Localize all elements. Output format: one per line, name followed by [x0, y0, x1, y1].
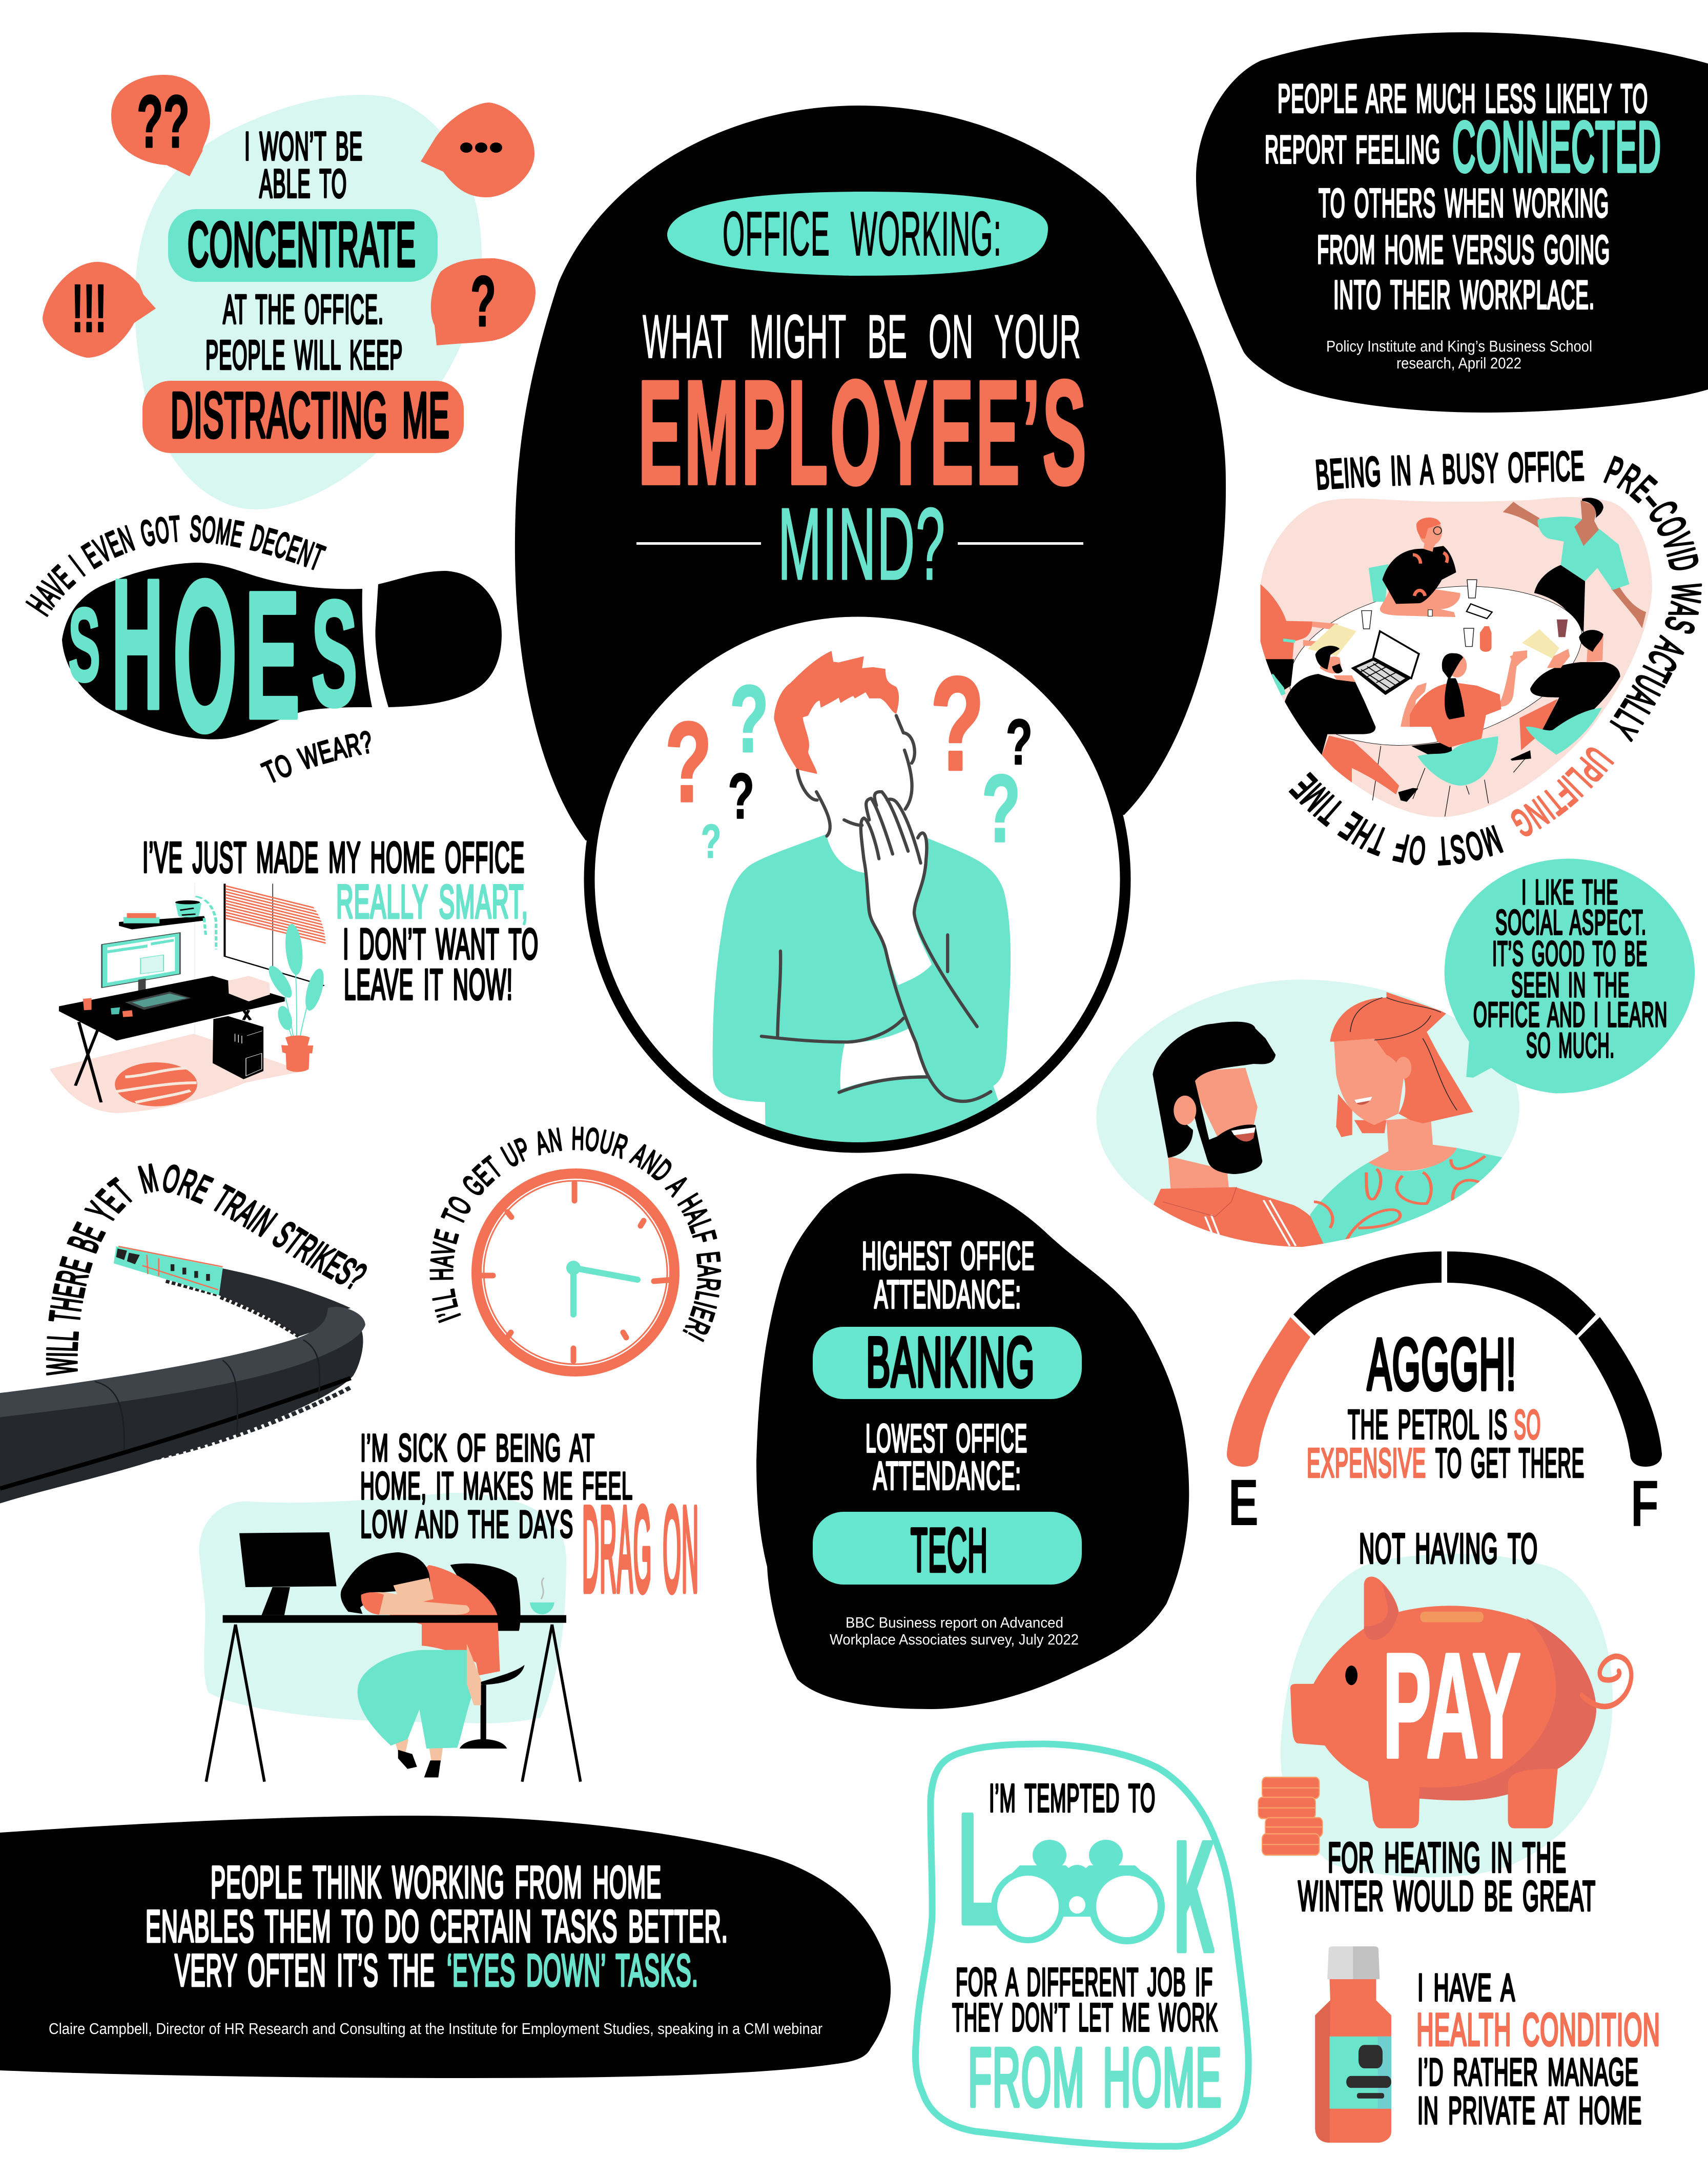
pink blob: [1261, 497, 1652, 817]
panel: look for job: K: [1174, 1809, 1214, 1984]
text: EMPLOYEE’S: [638, 350, 1088, 516]
panel: concentrate: CONCENTRATE: [188, 210, 416, 279]
text line: I HAVE A: [1417, 1966, 1515, 2009]
plant: [264, 923, 327, 1037]
label: [1330, 2037, 1391, 2109]
panel: petrol gauge: SO: [1514, 1402, 1541, 1447]
panel: clock: [424, 1121, 727, 1371]
main title blob: [515, 106, 1226, 840]
cups: [1362, 580, 1477, 647]
table: [1289, 586, 1582, 745]
panel: health condition: [1315, 1946, 1660, 2143]
question mark coral left: ?: [665, 698, 712, 825]
panel: eyes down: PEOPLE THINK WORKING FROM HOME: [211, 1857, 662, 1907]
source: Claire Campbell, Director of HR Research and Consulting at the Institute for Employment Studies, speaking in a CMI webinar: [49, 2020, 822, 2038]
panel: drag on: [199, 1426, 699, 1782]
shoe sole: [62, 563, 372, 739]
train near side: [0, 1327, 363, 1504]
ankles: [394, 1739, 443, 1762]
line work: [762, 715, 991, 1101]
text line: I’M SICK OF BEING AT: [360, 1426, 595, 1469]
chair: [1417, 736, 1498, 786]
panel: look for job: I’M TEMPTED TO: [989, 1776, 1156, 1820]
ear shade: [1364, 1584, 1398, 1640]
pig ear: [1364, 1576, 1398, 1640]
coffee cup: [1557, 620, 1568, 637]
panel: petrol gauge: [1227, 1251, 1662, 1540]
pig tail: [1582, 1656, 1631, 1707]
tired woman at desk: [199, 1493, 581, 1782]
panel: petrol gauge: THE PETROL IS: [1348, 1402, 1508, 1447]
panel: top right connected: [1196, 32, 1708, 413]
notebook: [1308, 624, 1356, 656]
black blob: [1196, 32, 1708, 413]
speech bubble ?: [431, 258, 536, 345]
pig shade: [1419, 1618, 1596, 1800]
man: [1149, 1022, 1328, 1258]
panel: petrol gauge: AGGGH!: [1367, 1324, 1517, 1405]
question mark teal small: ?: [701, 815, 721, 868]
panel: office attendance: LOWEST OFFICE: [866, 1416, 1027, 1461]
woman: [1310, 992, 1504, 1258]
question mark black right: ?: [1006, 707, 1033, 778]
illustration of two people: [1096, 979, 1519, 1258]
source: BBC Business report on Advanced: [846, 1615, 1063, 1631]
gauge segment: [1293, 1251, 1442, 1335]
plant pot: [175, 900, 201, 917]
curved text uplifting: UPLIFTING: [1511, 747, 1614, 836]
text line: ATTENDANCE:: [874, 1272, 1021, 1317]
F label: F: [1631, 1467, 1659, 1540]
title block: [636, 192, 1088, 601]
books: [124, 913, 159, 923]
shoes word: S: [68, 586, 100, 704]
shoes word: E: [244, 554, 300, 757]
window glass fill: [272, 883, 273, 971]
outline blob: [915, 1744, 1248, 2146]
bearded man's shoe: [1398, 788, 1418, 802]
clock face: [477, 1174, 674, 1371]
gauge segment: [1447, 1251, 1596, 1335]
curved text top: BEING IN A BUSY OFFICE: [1315, 450, 1584, 490]
blinds: [224, 886, 327, 943]
computer tower: [213, 1016, 263, 1079]
title line 3: MIND?: [778, 487, 946, 601]
monitor: [102, 933, 180, 996]
train roof: [0, 1307, 365, 1417]
cup: [530, 1602, 554, 1614]
black blob: [756, 1174, 1189, 1709]
curved text: I’LL HAVE TO GET UP AN HOUR AND A HALF EARLIER!: [429, 1126, 722, 1342]
panel: petrol gauge: EXPENSIVE: [1307, 1440, 1426, 1486]
shoe heel: [375, 571, 502, 707]
wall line: [194, 882, 195, 1035]
question marks: [668, 675, 1031, 858]
label shade: [1378, 2037, 1391, 2109]
standing woman: [1503, 498, 1646, 633]
panel: concentrate: [43, 75, 536, 509]
text: DRAG ON: [582, 1482, 699, 1616]
train front: [114, 1246, 223, 1295]
exclamation marks: !!!: [72, 271, 107, 346]
pill: [813, 1327, 1082, 1399]
panel: piggy bank: [1258, 1525, 1631, 1920]
exercise ball: [115, 1062, 197, 1106]
text: I DON’T WANT TO: [343, 920, 539, 968]
pig body: [1290, 1606, 1596, 1828]
text: WHAT MIGHT BE ON YOUR: [643, 302, 1081, 371]
text line: HOME, IT MAKES ME FEEL: [360, 1464, 633, 1507]
text highlight: ‘EYES DOWN’ TASKS.: [447, 1945, 698, 1996]
source: research, April 2022: [1396, 354, 1521, 372]
panel: office attendance: [756, 1174, 1189, 1709]
panel: concentrate: ABLE TO: [259, 161, 347, 206]
ellipsis dots: [460, 142, 502, 153]
question mark black: ?: [728, 761, 754, 832]
mug: [83, 998, 92, 1010]
panel: busy office: [1261, 450, 1702, 866]
panel: look for job: FROM HOME: [968, 2031, 1222, 2124]
panel: shoes: [26, 515, 502, 783]
clock pivot: [566, 1261, 581, 1275]
medicine bottle: [1315, 1946, 1391, 2143]
keyboard: [125, 992, 191, 1010]
pig eye: [1345, 1666, 1357, 1685]
hanging arm: [467, 1643, 481, 1705]
train far section: [219, 1268, 351, 1337]
laptop: [1351, 631, 1419, 695]
pill: [813, 1512, 1082, 1585]
bottle cap: [1327, 1946, 1380, 1979]
gauge full segment: [1578, 1317, 1662, 1467]
curved text bottom: MOST OF THE TIME: [1288, 772, 1504, 866]
woman with ponytail: [1401, 650, 1527, 786]
paper stack: [228, 976, 270, 1001]
chair: [450, 1564, 525, 1749]
right man: [1519, 662, 1620, 755]
floor: [50, 1034, 303, 1113]
source: Policy Institute and King’s Business School: [1326, 337, 1592, 355]
cap shade: [1353, 1946, 1380, 1979]
woman's face: [394, 1578, 434, 1603]
panel: shoes: S: [311, 569, 358, 738]
panel: home office: LEAVE IT NOW!: [344, 960, 513, 1009]
bearded man: [1285, 646, 1399, 794]
panel: top right connected: REPORT FEELING: [1265, 128, 1441, 172]
text line: ATTENDANCE:: [873, 1454, 1021, 1498]
home office illustration: [50, 882, 327, 1113]
black blob: [0, 1816, 891, 2078]
shoes word: O: [173, 536, 237, 776]
panel: concentrate: PEOPLE WILL KEEP: [205, 332, 403, 378]
panel: concentrate: AT THE OFFICE.: [223, 286, 384, 332]
mint blob: [199, 1493, 566, 1723]
woman's arm: [362, 1592, 469, 1615]
paper: [1522, 629, 1559, 659]
banking: BANKING: [866, 1323, 1035, 1402]
curved text: WILL THERE BE YET MORE TRAIN STRIKES?: [46, 1163, 367, 1375]
speech bubble ??: [111, 75, 210, 176]
forearm and hand: [868, 861, 932, 985]
question mark coral right: ?: [931, 650, 984, 798]
steam: [541, 1578, 544, 1599]
title rule right: [958, 542, 1083, 545]
train stripe: [0, 1378, 351, 1489]
text line: ENABLES THEM TO DO CERTAIN TASKS BETTER.: [146, 1901, 728, 1951]
table legs: [1372, 746, 1527, 816]
text line: NOT HAVING TO: [1359, 1525, 1538, 1572]
left woman: [1259, 584, 1338, 694]
right man's head: [1510, 630, 1603, 761]
title rule left: [636, 542, 761, 545]
notes: [122, 1010, 133, 1017]
text line highlight: REALLY SMART,: [336, 876, 528, 928]
coin stack: [1258, 1777, 1323, 1855]
distracting pill: [142, 381, 464, 453]
binoculars: [991, 1840, 1165, 1944]
desk legs: [206, 1625, 581, 1782]
panel: social aspect: SO MUCH.: [1526, 1026, 1615, 1065]
woman's top: [379, 1565, 500, 1675]
desk: [59, 976, 285, 1041]
panel: home office: [50, 833, 539, 1113]
mint background blob: [135, 95, 482, 509]
question marks double: ??: [137, 80, 190, 163]
clock inner ring: [484, 1181, 667, 1364]
vase: [281, 1035, 313, 1072]
clock ticks: [481, 1183, 673, 1361]
panel: piggy bank: PAY: [1383, 1622, 1521, 1789]
bottle body: [1315, 1979, 1391, 2143]
panel: train strikes: [0, 1156, 374, 1504]
panel: eyes down: [0, 1816, 891, 2078]
curved text: HAVE I EVEN GOT SOME DECENT: [26, 515, 327, 617]
speech bubble: [1445, 859, 1695, 1093]
mint blob: [1096, 979, 1519, 1247]
notes: [111, 1007, 120, 1015]
panel: look for job: [915, 1744, 1248, 2146]
title pill: [667, 192, 1048, 276]
train wheels: [156, 1387, 351, 1458]
man in black t-shirt: [1369, 518, 1460, 617]
label marks: [1346, 2045, 1391, 2099]
hair: [774, 651, 899, 774]
single question mark: ?: [470, 261, 496, 341]
white gap under arm: [840, 1029, 927, 1090]
trousers: [358, 1650, 479, 1749]
desk legs: [75, 1010, 251, 1102]
panel: look for job: L: [958, 1781, 999, 1956]
panel: look for job: THEY DON’T LET ME WORK: [952, 1996, 1218, 2040]
curved text: TO WEAR?: [260, 731, 371, 783]
shoes word: H: [111, 540, 163, 748]
phone: [1467, 604, 1492, 619]
panel: social aspect: [1096, 859, 1695, 1258]
panel: look for job: FOR A DIFFERENT JOB IF: [956, 1960, 1213, 2004]
question mark teal: ?: [730, 666, 769, 772]
bottle: [1480, 626, 1492, 652]
panel: office attendance: HIGHEST OFFICE: [862, 1234, 1035, 1278]
watch: [1428, 610, 1432, 616]
clock hands: [573, 1268, 637, 1314]
mint blob: [1281, 1554, 1613, 1877]
curved text right: PRE–COVID WAS ACTUALLY: [1603, 456, 1702, 742]
shoes: [398, 1750, 441, 1777]
speech bubble !!!: [43, 262, 156, 358]
shoes word: [68, 536, 358, 776]
text line: LOW AND THE DAYS: [360, 1503, 573, 1546]
concentrate pill: [168, 209, 438, 282]
woman's hair: [341, 1552, 430, 1614]
question mark teal right: ?: [982, 755, 1021, 862]
gauge empty segment: [1227, 1317, 1310, 1467]
desk top: [223, 1615, 566, 1623]
portrait circle: [589, 611, 1125, 1147]
speech bubble ...: [421, 102, 534, 197]
train far wheels: [166, 1281, 299, 1337]
panel: home office: I’VE JUST MADE MY HOME OFFICE: [142, 833, 525, 881]
sleeve: [361, 1592, 384, 1615]
window frame: [224, 883, 324, 985]
text line: VERY OFTEN IT’S THE: [175, 1945, 435, 1996]
panel: office attendance: TECH: [911, 1516, 988, 1585]
thinking man illustration: [665, 650, 1033, 1154]
hanging vine: [196, 896, 216, 950]
panel: concentrate: I WON’T BE: [244, 124, 363, 169]
shirt: [713, 834, 1017, 1154]
shelf: [119, 916, 206, 930]
bottle shade: [1315, 2000, 1330, 2143]
pig slot: [1420, 1612, 1484, 1622]
text line: I LIKE THE: [1521, 873, 1618, 912]
monitor: [239, 1532, 337, 1615]
source: Workplace Associates survey, July 2022: [830, 1632, 1079, 1648]
panel: concentrate: DISTRACTING ME: [171, 380, 450, 451]
train joints: [95, 1340, 320, 1450]
title block: OFFICE WORKING:: [723, 199, 1002, 269]
E label: E: [1228, 1466, 1259, 1539]
pig illustration: [1258, 1554, 1631, 1877]
